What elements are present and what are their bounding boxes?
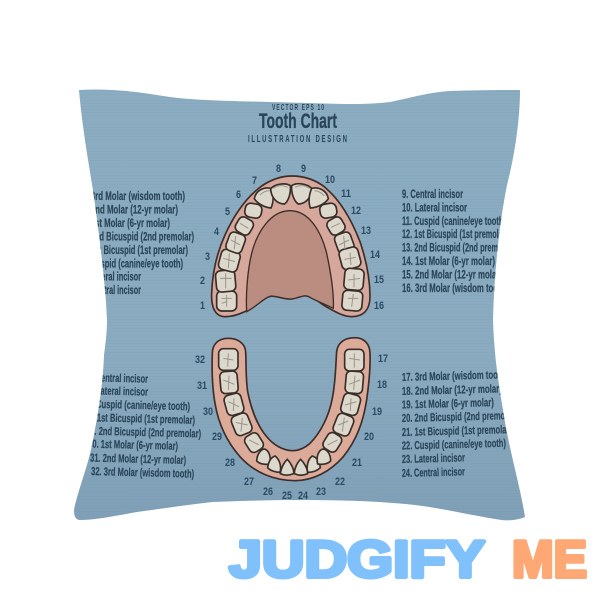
legend: lower right tooth list <box>402 370 508 478</box>
lower gum <box>212 338 370 481</box>
tooth numbers: 30 <box>203 406 213 418</box>
legend: upper right tooth list: 10. Lateral incisor <box>402 202 467 214</box>
upper tooth grooves <box>220 186 360 307</box>
upper jaw <box>212 176 370 317</box>
legend: lower right tooth list: 20. 2nd Bicuspid (2nd premolar) <box>402 410 517 425</box>
tooth numbers: 23 <box>316 486 326 498</box>
legend: lower left tooth list: 29. 2nd Bicuspid (2nd premolar) <box>86 426 201 441</box>
legend: upper left tooth list: 5. 1st Bicuspid (1st premolar) <box>82 245 188 257</box>
legend: upper right tooth list: 15. 2nd Molar (12-yr molar) <box>402 270 502 282</box>
tooth numbers: 10 <box>325 174 335 186</box>
tooth numbers: 6 <box>236 189 241 201</box>
legend: upper left tooth list: 2. 2nd Molar (12-yr molar) <box>82 204 178 216</box>
tooth numbers: 16 <box>374 300 384 312</box>
tooth numbers: 26 <box>263 486 273 498</box>
legend: lower right tooth list: 22. Cuspid (canine/eye tooth) <box>402 438 506 452</box>
tooth numbers: 19 <box>372 406 382 418</box>
subtitle: vector eps: VECTOR EPS 10 <box>272 104 324 112</box>
lower teeth <box>219 349 364 475</box>
legend: lower right tooth list: 18. 2nd Molar (12-yr molar) <box>402 383 502 398</box>
legend: upper left tooth list: 4. 2nd Bicuspid (2nd premolar) <box>82 232 194 244</box>
watermark <box>229 531 587 589</box>
legend: upper left tooth list: 6. Cuspid (canine/eye tooth) <box>82 258 183 270</box>
tooth numbers: 21 <box>352 457 362 469</box>
tooth numbers: 7 <box>252 175 257 187</box>
legend: lower left tooth list: 28. 1st Bicuspid (1st premolar) <box>84 412 195 427</box>
tooth numbers: 17 <box>378 353 388 365</box>
tooth numbers: 18 <box>377 379 387 391</box>
legend: lower left tooth list: 24. Central incisor <box>83 372 149 386</box>
lower jaw <box>212 338 370 481</box>
legend: lower right tooth list: 23. Lateral incisor <box>402 452 465 466</box>
legend: lower right tooth list: 17. 3rd Molar (wisdom tooth) <box>402 369 508 384</box>
legend: upper left tooth list: 1. 3rd Molar (wisdom tooth) <box>82 191 185 203</box>
tooth numbers: 27 <box>244 476 254 488</box>
tooth numbers <box>195 163 388 502</box>
legend: upper right tooth list: 9. Central incisor <box>402 189 463 201</box>
tooth numbers: 24 <box>298 490 309 502</box>
tooth numbers: 8 <box>276 163 281 175</box>
tooth numbers: 14 <box>370 249 381 261</box>
legend: lower left tooth list <box>83 372 201 481</box>
tooth numbers: 11 <box>341 188 351 200</box>
legend: lower left tooth list: 30. 1st Molar (6-yr molar) <box>88 439 178 453</box>
tooth numbers: 3 <box>205 251 210 263</box>
legend: lower right tooth list: 24. Central incisor <box>402 466 465 480</box>
title block <box>248 104 347 144</box>
subtitle: illustration design: ILLUSTRATION DESIGN <box>248 134 347 144</box>
tooth numbers: 29 <box>212 431 222 443</box>
legend: lower right tooth list: 21. 1st Bicuspid (1st premolar) <box>402 424 512 439</box>
tooth numbers: 22 <box>335 476 345 488</box>
legend: lower left tooth list: 27. Cuspid (canine/eye tooth) <box>83 399 190 413</box>
legend: lower left tooth list: 23. Lateral incisor <box>83 385 149 399</box>
tooth numbers: 31 <box>197 380 207 392</box>
tooth numbers: 9 <box>301 163 306 175</box>
tooth numbers: 32 <box>195 354 205 366</box>
tooth numbers: 1 <box>200 300 205 312</box>
tooth numbers: 5 <box>225 206 230 218</box>
tooth numbers: 13 <box>361 225 371 237</box>
tooth numbers: 12 <box>351 205 361 217</box>
upper teeth <box>215 184 365 311</box>
heading: tooth chart: Tooth Chart <box>259 110 337 133</box>
tooth numbers: 25 <box>282 490 292 502</box>
legend: upper left tooth list: 3. 1st Molar (6-yr molar) <box>82 218 170 230</box>
legend: upper right tooth list: 13. 2nd Bicuspid (2nd premolar) <box>402 242 514 254</box>
upper gum <box>212 176 370 317</box>
legend: upper right tooth list: 14. 1st Molar (6-yr molar) <box>402 256 495 268</box>
pillow <box>74 90 525 520</box>
watermark: me: ME <box>512 531 587 589</box>
legend: upper left tooth list: 7. Lateral incisor <box>82 272 141 284</box>
tooth numbers: 28 <box>225 457 235 469</box>
legend: upper right tooth list <box>402 188 502 295</box>
legend: lower right tooth list: 19. 1st Molar (6-yr molar) <box>402 397 494 411</box>
legend: upper left tooth list <box>93 190 194 294</box>
legend: upper right tooth list: 11. Cuspid (canine/eye tooth) <box>402 216 506 228</box>
tooth numbers: 4 <box>214 226 220 238</box>
tooth numbers: 15 <box>374 274 384 286</box>
palate <box>246 211 333 312</box>
legend: upper right tooth list: 16. 3rd Molar (wisdom tooth) <box>402 283 508 295</box>
legend: upper right tooth list: 12. 1st Bicuspid (1st premolar) <box>402 229 508 241</box>
legend: lower left tooth list: 31. 2nd Molar (12-yr molar) <box>90 453 186 467</box>
tooth numbers: 20 <box>364 431 374 443</box>
watermark: judgify: JUDGIFY <box>229 531 485 589</box>
tooth numbers: 2 <box>200 275 205 287</box>
legend: upper left tooth list: 8. Central incisor <box>82 285 141 297</box>
legend: lower left tooth list: 32. 3rd Molar (wisdom tooth) <box>91 466 194 481</box>
lower tooth grooves <box>223 353 360 445</box>
